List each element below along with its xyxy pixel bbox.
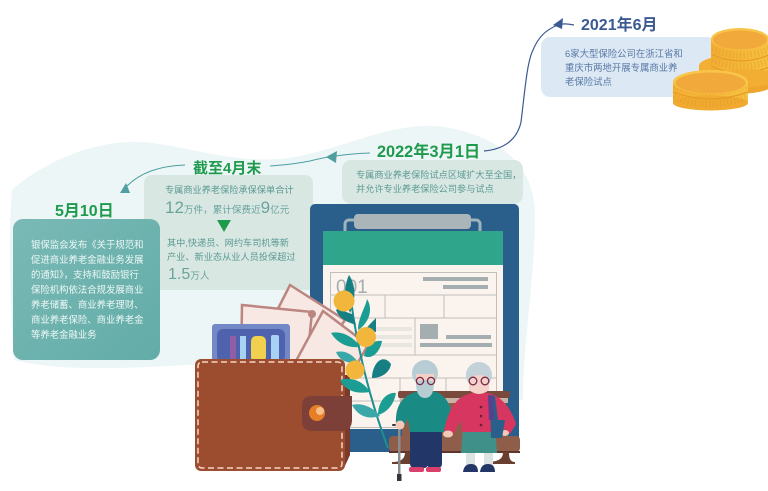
figure: elderly man xyxy=(393,360,452,481)
icon: coins xyxy=(673,28,768,110)
heading: 2022年3月1日: 2022年3月1日 xyxy=(377,142,480,161)
text: May description: 银保监会发布《关于规范和 xyxy=(31,239,144,250)
panel: 5月10日 xyxy=(13,219,160,360)
text: 2021 description: 6家大型保险公司在浙江省和 xyxy=(565,48,683,59)
panel: 截至4月末 xyxy=(144,175,313,290)
panel: 2021年6月 xyxy=(541,37,716,97)
clipboard xyxy=(310,204,519,452)
icon: wallet xyxy=(195,359,352,471)
icon: bank card xyxy=(212,324,290,362)
wallet clasp xyxy=(302,396,352,431)
text: May description xyxy=(31,239,144,340)
icon: down triangle xyxy=(217,220,231,232)
panel: 2022 xyxy=(342,160,523,204)
arrow: 2022 to 2021 xyxy=(484,18,574,151)
text: 2022 description: 并允许专业养老保险公司参与试点 xyxy=(356,183,494,194)
text: May description: 养老储蓄、商业养老理财、 xyxy=(31,299,144,310)
arrow: May to April xyxy=(120,165,185,193)
text: April stats: 其中,快递员、网约车司机等新 xyxy=(167,237,289,248)
text: 2022 description: 专属商业养老保险试点区域扩大至全国， xyxy=(356,169,521,180)
text: April stats: 专属商业养老保险承保保单合计 xyxy=(165,184,294,195)
icon: bench xyxy=(389,391,520,464)
text: 2022 description xyxy=(356,169,521,194)
figure: elderly woman xyxy=(443,362,516,472)
heading: 5月10日: 5月10日 xyxy=(55,203,114,220)
text: 2021 description: 老保险试点 xyxy=(565,76,612,87)
icon: banknotes xyxy=(241,285,368,385)
clip xyxy=(345,214,480,237)
text: 2021 description xyxy=(565,48,683,87)
cane xyxy=(393,425,404,481)
text: May description: 商业养老保险、商业养老金 xyxy=(31,314,144,325)
text: May description: 保险机构依法合规发展商业 xyxy=(31,284,144,295)
text: April stats: 12万件，累计保费近9亿元 xyxy=(165,198,290,217)
text: May description: 等养老金融业务 xyxy=(31,329,97,340)
form paper xyxy=(323,265,503,429)
background blob xyxy=(10,126,535,400)
text: May description: 促进商业养老金融业务发展 xyxy=(31,254,144,265)
text: April stats xyxy=(165,184,296,283)
icon: plant xyxy=(331,275,396,448)
heading: 截至4月末: 截至4月末 xyxy=(193,159,261,177)
text: May description: 的通知》，支持和鼓励银行 xyxy=(31,269,139,280)
form paper: 001 xyxy=(336,277,368,298)
heading: 2021年6月: 2021年6月 xyxy=(581,15,658,34)
text: 2021 description: 重庆市两地开展专属商业养 xyxy=(565,62,678,73)
text: April stats: 产业、新业态从业人员投保超过 xyxy=(167,251,296,262)
text: April stats: 1.5万人 xyxy=(168,266,210,283)
arrow: April to 2022 xyxy=(270,151,370,166)
